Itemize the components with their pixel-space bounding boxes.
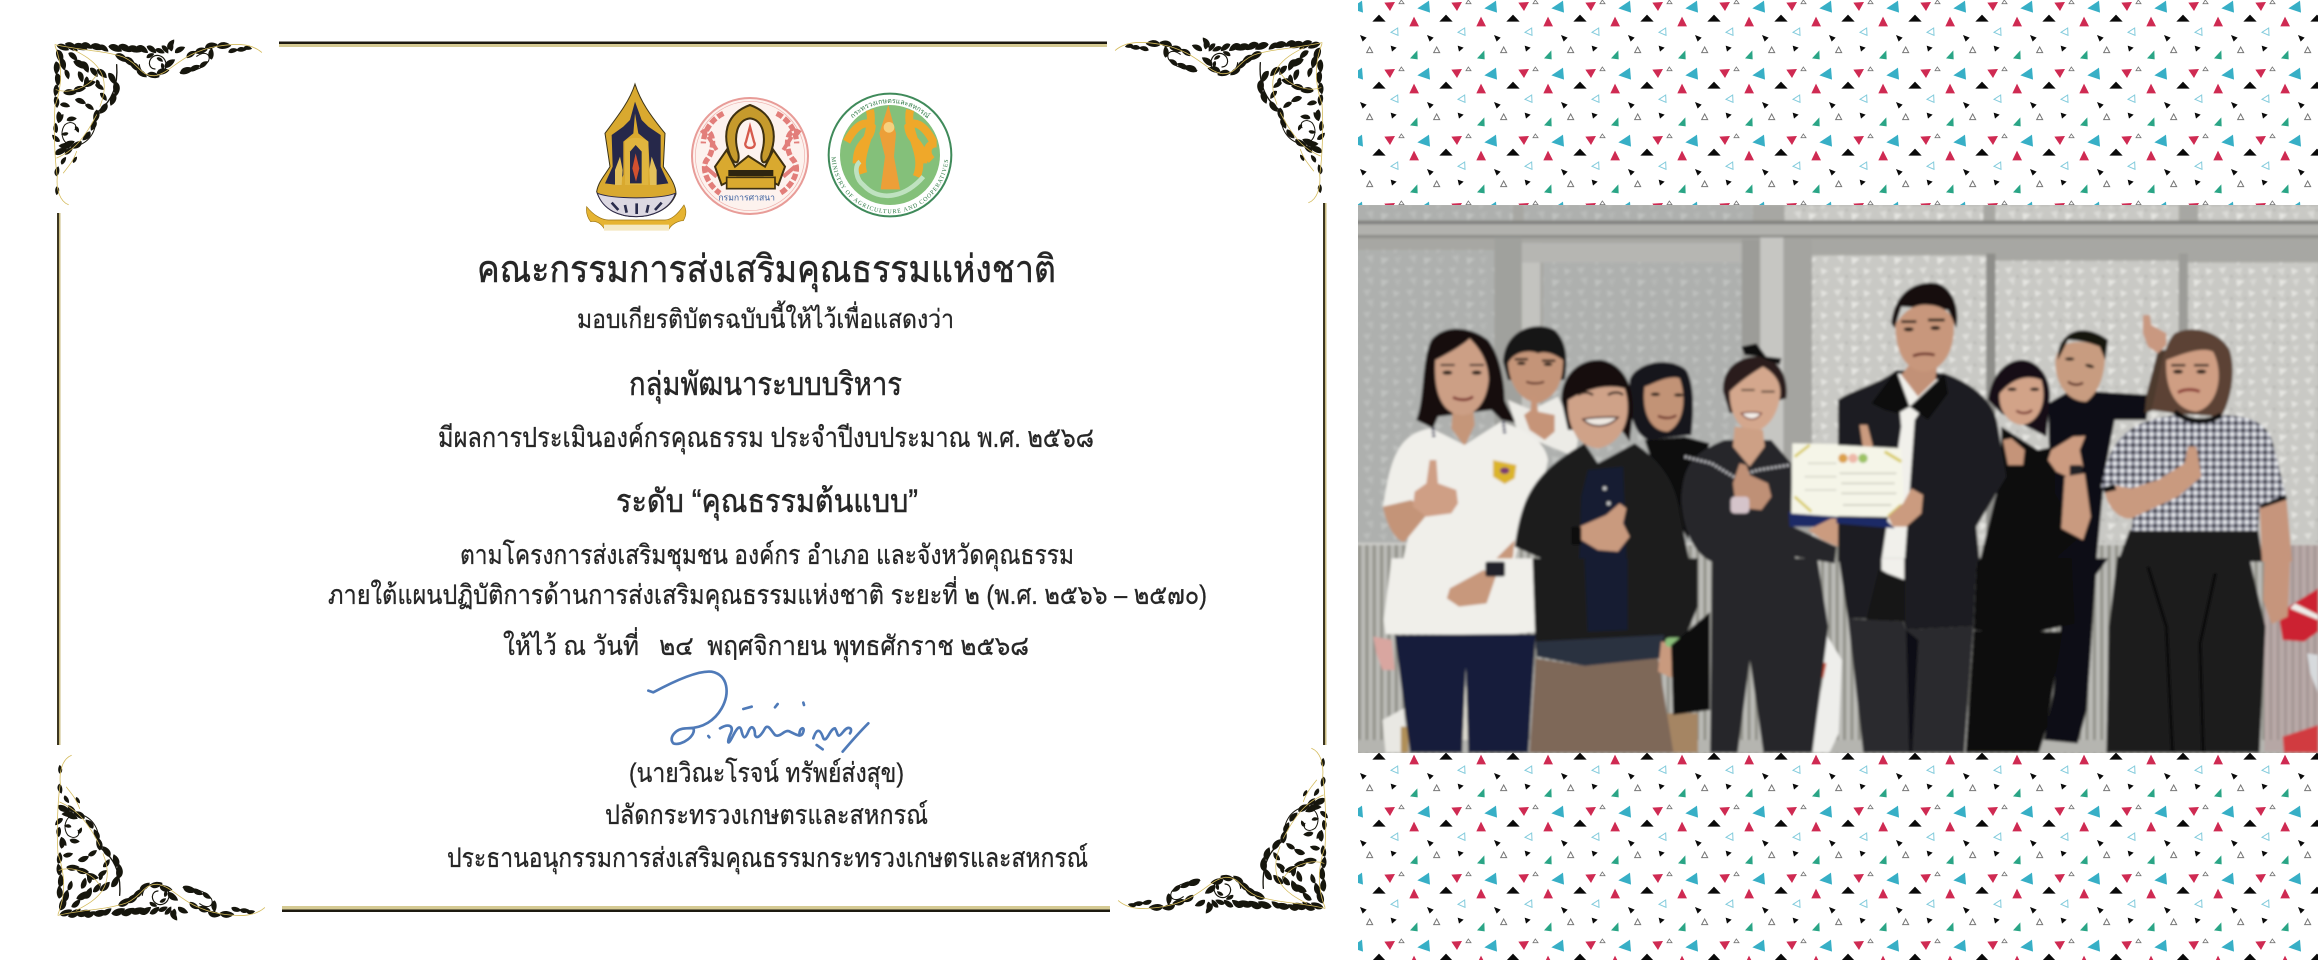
- certificate bottom border: [282, 906, 1110, 912]
- award level: ระดับ “คุณธรรมต้นแบบ”: [616, 483, 918, 521]
- icon: Ministry of Agriculture and Cooperatives seal: กระทรวงเกษตรและสหกรณ์: [851, 99, 931, 118]
- person: woman with dark hair at back: [1629, 362, 1710, 540]
- photo background: windows: [1354, 204, 2318, 760]
- icon: Ministry of Agriculture and Cooperatives seal: MINISTRY OF AGRICULTURE AND COOPERATIVES: [832, 156, 948, 214]
- icon: Ministry of Agriculture and Cooperatives seal: [828, 92, 952, 218]
- certificate left border: [57, 213, 60, 745]
- date text: ให้ไว้ ณ วันที่ ๒๔ พฤศจิกายน พุทธศักราช ๒๕๖๘: [503, 627, 1029, 663]
- assessment result text: มีผลการประเมินองค์กรคุณธรรม ประจำปีงบประมาณ พ.ศ. ๒๕๖๘: [438, 422, 1094, 455]
- person: woman in black blouse: [1681, 343, 1838, 753]
- certificate right border: [1323, 203, 1326, 745]
- certificate top border: [279, 42, 1107, 47]
- panel: triangle pattern top: [1358, 0, 2318, 205]
- person: woman in checked blouse: [2101, 329, 2292, 753]
- signatory committee role: ประธานอนุกรรมการส่งเสริมคุณธรรมกระทรวงเกษตรและสหกรณ์: [447, 842, 1088, 875]
- icon: Department of Religious Affairs seal: กรมการศาสนา: [718, 193, 775, 203]
- project text line 1: ตามโครงการส่งเสริมชุมชน องค์กร อำเภอ และจังหวัดคุณธรรม: [460, 539, 1074, 572]
- recipient name: กลุ่มพัฒนาระบบบริหาร: [629, 366, 902, 404]
- person: man in dark jacket holding certificate: [1838, 283, 2006, 753]
- title: คณะกรรมการส่งเสริมคุณธรรมแห่งชาติ: [477, 249, 1056, 292]
- subtitle text: มอบเกียรติบัตรฉบับนี้ให้ไว้เพื่อแสดงว่า: [577, 300, 954, 334]
- person: man raising thumb at back right: [2044, 315, 2166, 743]
- icon: Royal crest emblem: [586, 84, 686, 231]
- panel: certificate: [52, 38, 1328, 920]
- person: man at back left: [1503, 326, 1578, 457]
- ornament: bottom left corner: [53, 755, 265, 922]
- icon: Department of Religious Affairs seal: [692, 98, 808, 214]
- ornament: top right corner: [1115, 36, 1327, 203]
- certificate held in photo, right half: [1836, 445, 1923, 528]
- project text line 2: ภายใต้แผนปฏิบัติการด้านการส่งเสริมคุณธรรมแห่งชาติ ระยะที่ ๒ (พ.ศ. ๒๕๖๖ – ๒๕๗๐): [328, 576, 1207, 612]
- ornament: top left corner: [50, 38, 262, 205]
- photo background: radiator and floor objects: [1355, 545, 2318, 755]
- signature: [648, 672, 868, 752]
- person: woman in black jacket: [1515, 360, 1698, 753]
- person: woman in black at right of centre: [1966, 360, 2091, 753]
- person: woman in white polo: [1383, 329, 1548, 753]
- certificate held in photo: [1789, 443, 1838, 540]
- person: woman behind, lower body: [1671, 612, 1710, 715]
- panel: group photo: [1358, 205, 2318, 753]
- signatory position: ปลัดกระทรวงเกษตรและสหกรณ์: [605, 799, 928, 830]
- ornament: bottom right corner: [1118, 748, 1330, 915]
- panel: triangle pattern bottom: [1358, 753, 2318, 960]
- signatory name: (นายวิณะโรจน์ ทรัพย์ส่งสุข): [629, 757, 904, 790]
